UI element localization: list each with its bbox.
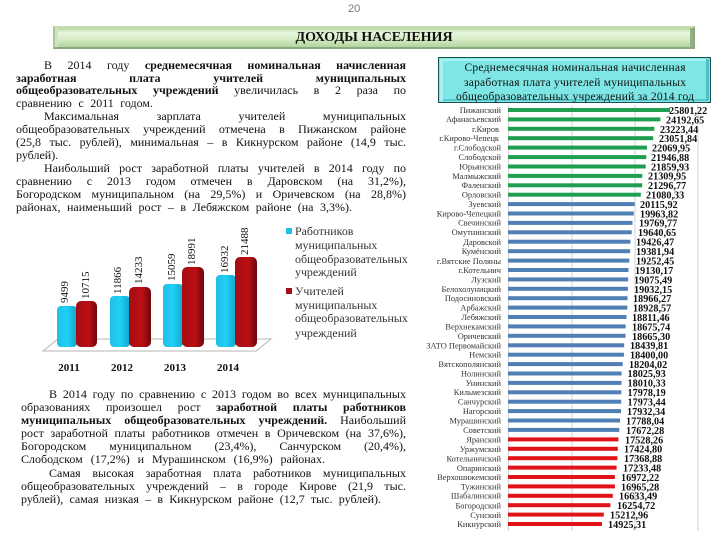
bar value labels: 16932 (219, 246, 231, 273)
row: Зуевский: 20115,92 (640, 200, 678, 211)
row: Арбажский (460, 304, 671, 314)
bar value labels: 10715 (80, 271, 92, 299)
row: Вятскополянский (438, 360, 667, 371)
row: Оричевский (458, 332, 670, 343)
row: Арбажский: Арбажский (460, 304, 502, 312)
row: г.Слободской (454, 144, 690, 154)
text block: teachers' salaries: сравнению с 2011 годом. (16, 96, 153, 110)
bars 2011 (57, 301, 97, 347)
text block: teachers' salaries: районах, наименьший рост – в Лебяжском районе (на 3,3%). (16, 200, 352, 214)
text block: teachers' salaries: (25,8 тыс. рублей), минимальная – в Кикнурском районе (14,9 тыс. (16, 135, 406, 149)
row: Лузский: Лузский (471, 276, 502, 284)
legend: teachers: общеобразовательных (295, 311, 408, 325)
text block: all workers' salaries (21, 387, 406, 506)
row: Юрьянский (459, 162, 689, 174)
row: Нагорский: Нагорский (463, 407, 502, 416)
row: Фаленский: 21296,77 (648, 181, 686, 192)
right chart title box: общеобразовательных учреждений за 2014 год (456, 91, 694, 103)
row: Слободской (459, 153, 689, 164)
row: Унинский (466, 378, 666, 390)
legend: teachers: Учителей (295, 284, 344, 298)
row: ЗАТО Первомайский (426, 341, 668, 352)
row: Богородский: 16254,72 (617, 501, 655, 512)
row: Верхнекамский: 18675,74 (632, 322, 670, 334)
right chart title box (438, 58, 710, 103)
legend: workers: Работников (295, 224, 354, 238)
row: Кикнурский: Кикнурский (457, 520, 502, 529)
row: Мурашинский: 17788,04 (626, 416, 664, 428)
year labels (58, 362, 240, 374)
legend: workers (286, 224, 408, 279)
text block: teachers' salaries: Богородском муниципальном (на 29,5%) и Оричевском (на 28,8%) (16, 187, 406, 201)
chart floor (43, 339, 271, 351)
row: Кирово-Чепецкий (437, 210, 678, 220)
row: Слободской: Слободской (459, 153, 502, 162)
row: Яранский: 17528,26 (625, 436, 663, 446)
bars 2013 (163, 267, 204, 347)
row: Советский: Советский (463, 426, 502, 435)
row: Афанасьевский (446, 115, 704, 126)
right chart title box: Среднемесячная номинальная начисленная (464, 62, 686, 74)
year labels: 2014 (217, 362, 240, 374)
year labels: 2011 (58, 362, 80, 374)
year labels: 2012 (111, 362, 134, 374)
row: Советский (463, 426, 664, 437)
text block: all workers' salaries: рублей), самая низкая – в Кикнурском районе (12,7 тыс. рублей). (21, 492, 381, 506)
text block: all workers' salaries: Самая высокая заработная плата работников муниципальных (49, 466, 406, 480)
row: г.Слободской: г.Слободской (454, 144, 502, 152)
row: Вятскополянский: 18204,02 (629, 360, 667, 371)
text block: teachers' salaries: сравнению с 2013 годом отмечен в Даровском (на 31,2%), (16, 174, 406, 188)
row: Тужинский: 16965,28 (621, 482, 659, 494)
row: Опаринский: 17233,48 (623, 464, 661, 474)
row: Лебяжский: Лебяжский (461, 313, 502, 322)
text block: teachers' salaries (16, 58, 406, 214)
row: Малмыжский (452, 172, 686, 182)
row: Котельничский: Котельничский (446, 454, 502, 464)
row: Кумёнский: 19381,94 (636, 247, 674, 258)
row: Юрьянский: 21859,93 (651, 162, 689, 174)
row: Опаринский: Опаринский (457, 464, 502, 473)
row: г.Котельнич: г.Котельнич (459, 266, 502, 275)
row: Уржумский: 17424,80 (624, 444, 662, 456)
row: Нолинский: 18025,93 (628, 369, 666, 380)
bars 2012 (110, 287, 151, 347)
legend: workers: учреждений (295, 265, 357, 279)
text block: teachers' salaries: заработная плата учителей муниципальных (16, 71, 406, 85)
row: Тужинский: Тужинский (461, 482, 502, 492)
row: Богородский: Богородский (455, 502, 502, 510)
bar value labels: 14233 (133, 256, 145, 284)
row: Пижанский (460, 106, 707, 117)
text block: all workers' salaries: муниципальных общеобразовательных учреждений. Наибольший (21, 413, 406, 427)
row: Юрьянский: Юрьянский (459, 162, 502, 172)
row: г.Киров: г.Киров (472, 125, 499, 134)
row: Белохолуницкий (442, 285, 672, 296)
row: Кикнурский (457, 520, 646, 531)
text block: all workers' salaries: В 2014 году по сравнению с 2013 годом во всех муниципальных (49, 387, 406, 401)
row: Омутнинский: 19640,65 (638, 228, 676, 239)
row: Омутнинский: Омутнинский (452, 228, 502, 237)
row: Афанасьевский: 24192,65 (666, 116, 704, 126)
row: Кильмезский (454, 388, 666, 399)
row: Даровской: Даровской (463, 238, 502, 247)
row: Слободской: 21946,88 (651, 153, 689, 164)
row: г.Киров: 23223,44 (660, 125, 698, 136)
row: Лузский (471, 276, 672, 286)
row: Орловский: 21080,33 (646, 190, 684, 202)
legend: teachers: муниципальных (295, 298, 377, 312)
row: Нолинский (461, 369, 666, 380)
row: Немский: Немский (469, 350, 502, 360)
bar value labels: 15059 (166, 253, 178, 281)
row: Арбажский: 18928,57 (633, 304, 671, 314)
row: г.Кирово-Чепецк: г.Кирово-Чепецк (439, 134, 500, 143)
text block: teachers' salaries: рублей). (16, 148, 58, 162)
row: Оричевский: Оричевский (458, 332, 502, 341)
bar chart: salaries by district (426, 106, 707, 531)
text block: teachers' salaries: общеобразовательных учреждений отмечена в Пижанском районе (16, 122, 406, 136)
row: Санчурский: Санчурский (458, 398, 502, 406)
row: Свечинский: Свечинский (458, 218, 502, 228)
row: Нагорский (463, 407, 665, 418)
row: Пижанский: 25801,22 (669, 106, 707, 117)
year labels: 2013 (164, 362, 186, 374)
row: г.Котельнич (459, 266, 673, 277)
row: Унинский: 18010,33 (628, 378, 666, 390)
legend: teachers: учреждений (295, 326, 357, 340)
legend: workers: общеобразовательных (295, 252, 408, 266)
bar value labels (59, 227, 251, 303)
row: Даровской (463, 238, 674, 248)
row: Подосиновский: Подосиновский (445, 294, 502, 303)
bar value labels: 11866 (112, 266, 124, 294)
row: Уржумский: Уржумский (460, 445, 502, 454)
text block: teachers' salaries: Наибольший рост заработной платы учителей в 2014 году по (44, 161, 406, 175)
row: Орловский (462, 190, 684, 202)
text block: all workers' salaries: Богородском муниципальном (23,4%), Санчурском (20,4%), (21, 439, 406, 453)
row: Белохолуницкий: 19032,15 (634, 285, 672, 296)
row: Лузский: 19075,49 (634, 276, 672, 286)
row: Богородский (455, 501, 655, 512)
row: Верхошижемский (437, 473, 659, 484)
right chart title box: заработная плата учителей муниципальных (464, 77, 686, 89)
row: г.Котельнич: 19130,17 (635, 266, 673, 277)
row: Зуевский (468, 200, 678, 211)
row: Оричевский: 18665,30 (632, 332, 670, 343)
row: г.Киров (472, 125, 698, 136)
row: Вятскополянский: Вятскополянский (438, 360, 502, 369)
row: Лебяжский: 18811,46 (632, 313, 670, 324)
row: Нагорский: 17932,34 (627, 407, 665, 418)
row: Верхошижемский: Верхошижемский (437, 473, 502, 482)
row: Сунский (470, 510, 648, 522)
row: Немский: 18400,00 (630, 350, 668, 362)
row: Свечинский: 19769,77 (639, 218, 677, 230)
row: Нолинский: Нолинский (461, 370, 502, 378)
title banner (53, 26, 695, 49)
text block: all workers' salaries: общеобразовательных учреждений – в городе Кирове (21,9 тыс. (21, 479, 406, 493)
row: Кумёнский: Кумёнский (462, 247, 502, 256)
row: г.Вятские Поляны (437, 256, 674, 268)
row: Лебяжский (461, 313, 670, 324)
row: г.Вятские Поляны: г.Вятские Поляны (437, 257, 501, 266)
row: Опаринский (457, 464, 661, 474)
row: Мурашинский: Мурашинский (450, 416, 502, 426)
text block: all workers' salaries: образованиях произошел рост заработной платы работников (21, 400, 406, 414)
row: Яранский: Яранский (466, 436, 502, 444)
row: Верхошижемский: 16972,22 (621, 473, 659, 484)
row: Фаленский: Фаленский (461, 181, 502, 190)
row: Санчурский (458, 398, 666, 408)
legend: teachers (286, 284, 408, 340)
row: Афанасьевский: Афанасьевский (446, 115, 502, 124)
row: Мурашинский (450, 416, 664, 428)
text block: teachers' salaries: Максимальная зарплата учителей муниципальных (44, 109, 406, 123)
row: Орловский: Орловский (462, 190, 502, 200)
bar value labels: 18991 (186, 238, 198, 265)
row: Свечинский (458, 218, 677, 230)
row: Котельничский (446, 454, 662, 465)
row: Даровской: 19426,47 (636, 238, 674, 248)
text block: teachers' salaries: общеобразовательных учреждений увеличилась в 2 раза по (16, 83, 406, 97)
row: г.Кирово-Чепецк (439, 134, 697, 145)
row: Котельничский: 17368,88 (624, 454, 662, 465)
bar value labels: 21488 (239, 227, 251, 255)
bar chart grid (508, 105, 698, 531)
row: Зуевский: Зуевский (468, 200, 502, 209)
row: Малмыжский: Малмыжский (452, 172, 502, 181)
row: Сунский: 15212,96 (610, 510, 648, 522)
row: ЗАТО Первомайский: 18439,81 (630, 341, 668, 352)
legend: workers: муниципальных (295, 238, 377, 252)
row: Шабалинский: Шабалинский (451, 492, 502, 500)
row: Уржумский (460, 444, 662, 456)
text block: teachers' salaries: В 2014 году среднемесячная номинальная начисленная (44, 58, 406, 72)
row: Санчурский: 17973,44 (628, 398, 666, 408)
row: Верхнекамский (445, 322, 670, 334)
title banner: ДОХОДЫ НАСЕЛЕНИЯ (295, 30, 453, 45)
text block: all workers' salaries: рост заработной платы работников отмечен в Оричевском (на 37,6%), (21, 426, 406, 440)
row: Кикнурский: 14925,31 (608, 520, 646, 531)
row: Немский (469, 350, 668, 362)
row: Тужинский (461, 482, 659, 494)
row: г.Слободской: 22069,95 (652, 144, 690, 154)
row: Унинский: Унинский (466, 379, 502, 388)
row: г.Вятские Поляны: 19252,45 (636, 256, 674, 268)
row: Кирово-Чепецкий: Кирово-Чепецкий (437, 210, 502, 218)
row: Кильмезский: 17978,19 (628, 388, 666, 399)
row: Подосиновский: 18966,27 (633, 294, 671, 305)
row: Фаленский (461, 181, 686, 192)
row: Подосиновский (445, 294, 671, 305)
bar value labels: 9499 (59, 280, 71, 303)
row: Шабалинский (451, 492, 657, 502)
row: Верхнекамский: Верхнекамский (445, 322, 502, 332)
bars 2014 (216, 257, 257, 347)
row: Кирово-Чепецкий: 19963,82 (640, 210, 678, 220)
row: Кильмезский: Кильмезский (454, 388, 502, 397)
row: Шабалинский: 16633,49 (619, 492, 657, 502)
row: Пижанский: Пижанский (460, 106, 502, 115)
page number: 20 (348, 3, 360, 15)
row: г.Кирово-Чепецк: 23051,84 (659, 134, 697, 145)
row: Омутнинский (452, 228, 676, 239)
row: Белохолуницкий: Белохолуницкий (442, 285, 502, 294)
row: ЗАТО Первомайский: ЗАТО Первомайский (426, 342, 502, 350)
row: Сунский: Сунский (470, 511, 502, 520)
row: Малмыжский: 21309,95 (648, 172, 686, 182)
row: Яранский (466, 436, 663, 446)
row: Кумёнский (462, 247, 674, 258)
text block: all workers' salaries: Слободском (17,2%) и Мурашинском (16,9%) районах. (21, 452, 325, 466)
row: Советский: 17672,28 (626, 426, 664, 437)
